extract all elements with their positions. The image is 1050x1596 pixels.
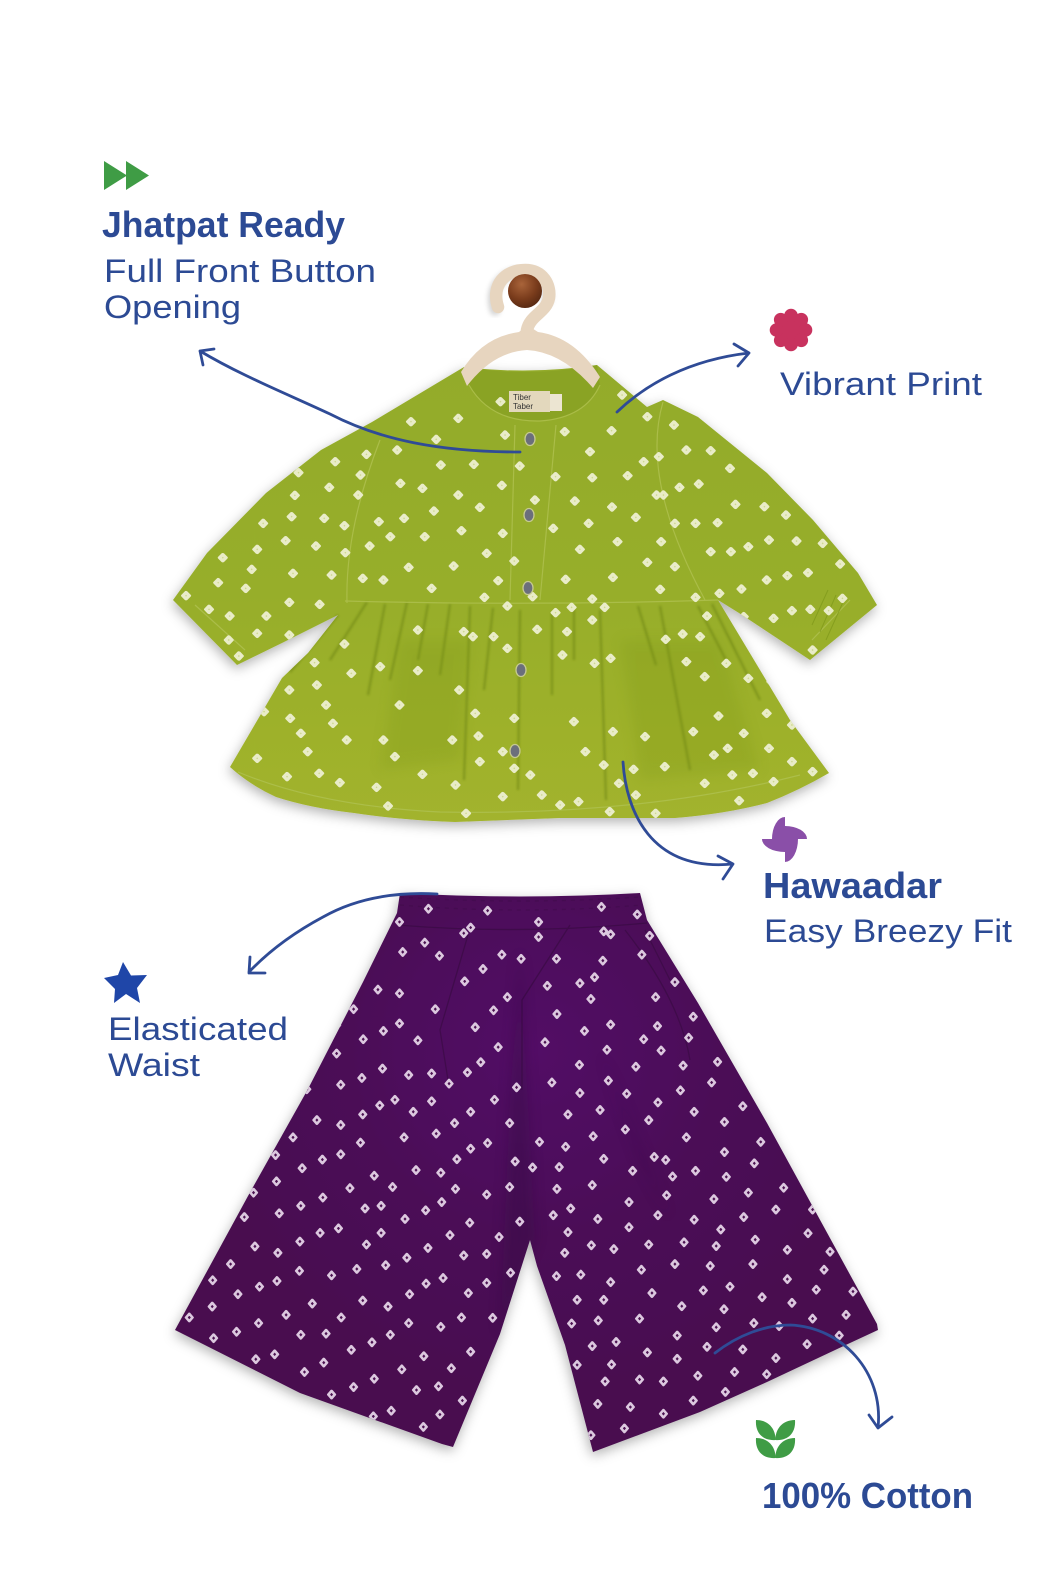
- neck label: [509, 391, 562, 412]
- heading: Hawaadar: Hawaadar: [763, 865, 942, 906]
- callout: Elasticated Waist: [104, 962, 288, 1083]
- text: Vibrant Print: Vibrant Print: [780, 366, 982, 402]
- arrow: to Jhatpat Ready: [200, 349, 520, 452]
- blouse: green bandhani top: [173, 365, 877, 822]
- pants dots: [186, 903, 856, 1439]
- text: Full Front Button Opening: Full Front Button: [104, 253, 376, 289]
- neck label: Taber: [513, 402, 533, 411]
- arrow: to 100% Cotton: [715, 1325, 892, 1428]
- icon: leaves: [756, 1420, 795, 1458]
- blouse buttons: [510, 432, 535, 758]
- neck label: Tiber: [513, 393, 531, 402]
- heading: 100% Cotton: 100% Cotton: [762, 1475, 973, 1516]
- icon: pinwheel: [762, 817, 807, 862]
- arrow: to Hawaadar: [623, 762, 733, 879]
- callout: Vibrant Print: [770, 309, 982, 402]
- text: Full Front Button Opening: Opening: [104, 289, 241, 325]
- arrow: to Vibrant Print: [617, 344, 749, 412]
- text: Elasticated Waist: Elasticated: [108, 1011, 288, 1047]
- heading: Jhatpat Ready: Jhatpat Ready: [102, 204, 345, 245]
- icon: star: [104, 962, 147, 1003]
- text: Elasticated Waist: Waist: [108, 1047, 200, 1083]
- text: Easy Breezy Fit: Easy Breezy Fit: [764, 913, 1012, 949]
- wooden knob: [508, 274, 542, 308]
- hanger: [461, 270, 600, 388]
- arrow: to Elasticated Waist: [249, 894, 437, 973]
- blouse dots: [183, 392, 846, 817]
- pants: purple bandhani palazzo: [175, 893, 878, 1452]
- icon: flower: [770, 309, 812, 351]
- text: Elasticated Waist: [108, 1011, 288, 1083]
- icon: fast-forward: [104, 161, 149, 190]
- text: Full Front Button Opening: [104, 253, 376, 325]
- callout: Hawaadar: [762, 817, 1012, 949]
- callout: 100% Cotton: [756, 1420, 973, 1516]
- callout: Jhatpat Ready: [102, 161, 376, 325]
